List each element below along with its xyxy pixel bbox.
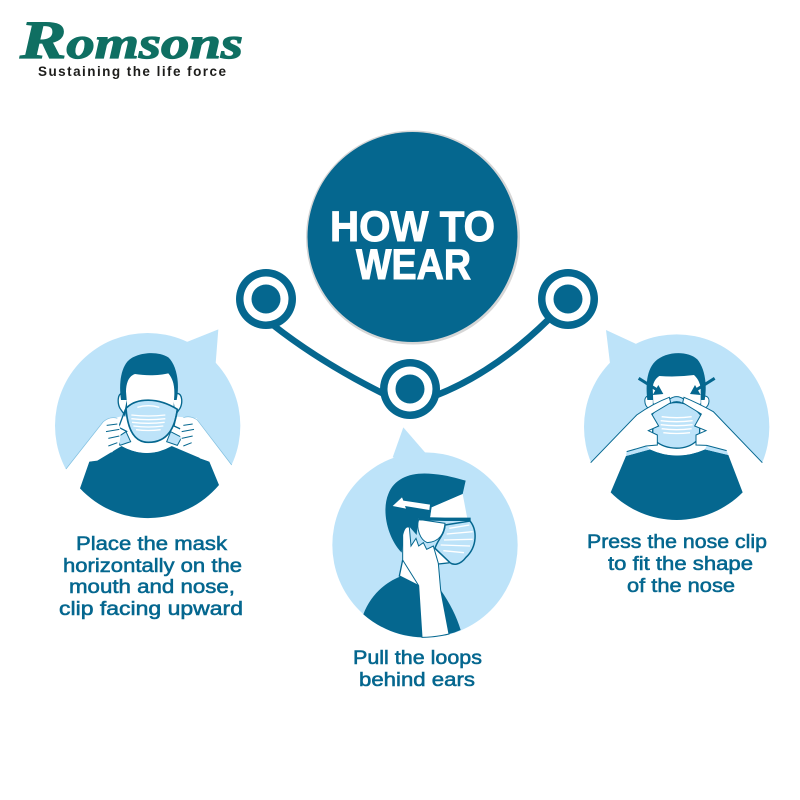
white arms (577, 398, 777, 523)
logo wordmark: Romsons (19, 10, 243, 70)
caption: press the nose clip: of the nose (627, 575, 735, 597)
ears (645, 396, 709, 408)
mask (435, 521, 475, 564)
mask (126, 400, 177, 442)
face (653, 375, 701, 403)
right hand (179, 417, 232, 465)
mask pleats (661, 417, 693, 433)
title text: WEAR (356, 241, 471, 289)
node: middle (380, 359, 440, 419)
neck (650, 437, 705, 455)
logo tagline: Sustaining the life force (38, 64, 226, 79)
connector curve (273, 319, 549, 395)
shirt (611, 449, 743, 520)
ear (418, 519, 445, 543)
panel: press the nose clip (577, 330, 777, 523)
mask (652, 402, 701, 448)
caption: pull the loops: Pull the loops (353, 647, 482, 669)
caption: place the mask: Place the mask (76, 533, 227, 555)
caption: press the nose clip (587, 531, 767, 597)
title text: HOW TO (330, 203, 495, 251)
speech bubble (55, 329, 240, 518)
face (430, 494, 467, 519)
caption: place the mask (59, 533, 243, 620)
white arms (53, 417, 243, 523)
caption: press the nose clip: to fit the shape (608, 553, 753, 575)
caption: place the mask: horizontally on the (63, 555, 242, 577)
rotation arrow (393, 497, 430, 510)
right hand (683, 397, 762, 463)
node: left (236, 269, 296, 329)
nose clip (669, 397, 684, 403)
left hand (66, 418, 121, 469)
neck (399, 548, 453, 590)
directional arrows (639, 378, 715, 395)
caption: pull the loops (353, 647, 482, 691)
speech bubble (584, 330, 769, 520)
ears (118, 393, 182, 415)
shirt (80, 446, 219, 518)
hair (385, 473, 466, 553)
caption: place the mask: clip facing upward (59, 598, 243, 620)
ear loops (119, 409, 181, 432)
hair (647, 353, 706, 400)
logo (19, 10, 243, 79)
panel: place the mask (53, 329, 243, 523)
mask pleats (441, 525, 473, 553)
shirt (363, 577, 461, 637)
speech bubble (332, 427, 518, 638)
neck (122, 432, 172, 453)
face (126, 373, 174, 420)
node: right (538, 269, 598, 329)
mask pleats (131, 406, 165, 430)
caption: press the nose clip: Press the nose clip (587, 531, 767, 553)
hand and arm (403, 527, 449, 637)
left hand (591, 397, 671, 463)
hair (120, 353, 178, 400)
glasses strap (418, 514, 471, 524)
panel: pull the loops (332, 427, 518, 638)
title badge (306, 130, 520, 344)
caption: pull the loops: behind ears (359, 669, 475, 691)
caption: place the mask: mouth and nose, (69, 576, 235, 598)
